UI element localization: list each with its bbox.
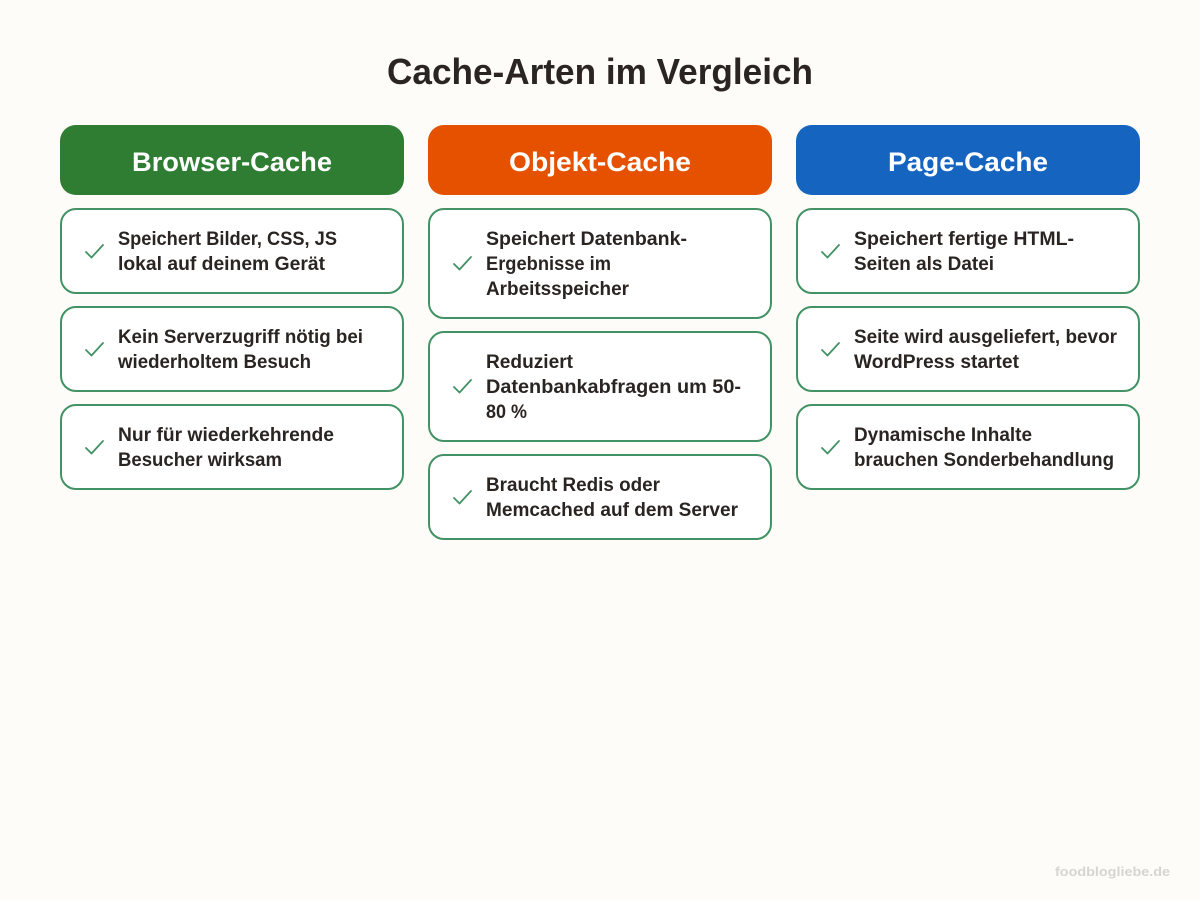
card: Kein Serverzugriff — [61, 307, 403, 391]
panel: Browser-Cache column — [60, 125, 404, 489]
panel: Page-Cache column — [796, 125, 1140, 489]
heading: Browser-Cache — [60, 125, 404, 195]
card: Speichert Bilder: lokal auf deinem Gerät — [118, 254, 326, 275]
card: Reduziert Datenbankabfragen: Reduziert — [486, 352, 574, 373]
heading: Browser-Cache: Browser-Cache — [132, 147, 332, 177]
card: Speichert Datenbank-Ergebnisse: Ergebnisse im — [486, 254, 611, 275]
card: Reduziert Datenbankabfragen: 80 % — [486, 402, 527, 423]
card: Braucht Redis — [429, 455, 771, 539]
card: Reduziert Datenbankabfragen — [429, 332, 771, 441]
card: Braucht Redis: Braucht Redis oder — [486, 475, 661, 496]
card: Dynamische Inhalte — [797, 405, 1139, 489]
card: Speichert fertige HTML-Seiten: Seiten als Datei — [854, 254, 994, 275]
card: Nur für wiederkehrende: Besucher wirksam — [118, 450, 282, 471]
card: Nur für wiederkehrende — [61, 405, 403, 489]
card: Nur für wiederkehrende: Nur für wiederkehrende — [118, 425, 334, 446]
card: Dynamische Inhalte: brauchen Sonderbehandlung — [854, 450, 1114, 471]
footer watermark: foodblogliebe.de — [1055, 864, 1170, 879]
card: Speichert fertige HTML-Seiten: Speichert fertige HTML- — [854, 229, 1074, 250]
card: Kein Serverzugriff: Kein Serverzugriff nötig bei — [118, 327, 363, 348]
panel: Objekt-Cache column — [428, 125, 772, 539]
card: Seite wird ausgeliefert: Seite wird ausgeliefert, bevor — [854, 327, 1118, 348]
card: Braucht Redis: Memcached auf dem Server — [486, 500, 739, 521]
heading: Page-Cache: Page-Cache — [888, 147, 1048, 177]
title: Cache-Arten im Vergleich — [387, 51, 813, 92]
card: Reduziert Datenbankabfragen: Datenbankabfragen um 50- — [486, 377, 741, 398]
heading: Objekt-Cache — [428, 125, 772, 195]
heading: Page-Cache — [796, 125, 1140, 195]
card: Speichert Datenbank-Ergebnisse — [429, 209, 771, 318]
card: Seite wird ausgeliefert: WordPress startet — [854, 352, 1020, 373]
card: Speichert Datenbank-Ergebnisse: Arbeitsspeicher — [486, 279, 630, 300]
card: Dynamische Inhalte: Dynamische Inhalte — [854, 425, 1032, 446]
card: Seite wird ausgeliefert — [797, 307, 1139, 391]
card: Speichert Bilder — [61, 209, 403, 293]
card: Kein Serverzugriff: wiederholtem Besuch — [117, 352, 311, 373]
card: Speichert Bilder: Speichert Bilder, CSS, JS — [118, 229, 337, 250]
heading: Objekt-Cache: Objekt-Cache — [509, 147, 691, 177]
card: Speichert Datenbank-Ergebnisse: Speichert Datenbank- — [486, 229, 687, 250]
card: Speichert fertige HTML-Seiten — [797, 209, 1139, 293]
